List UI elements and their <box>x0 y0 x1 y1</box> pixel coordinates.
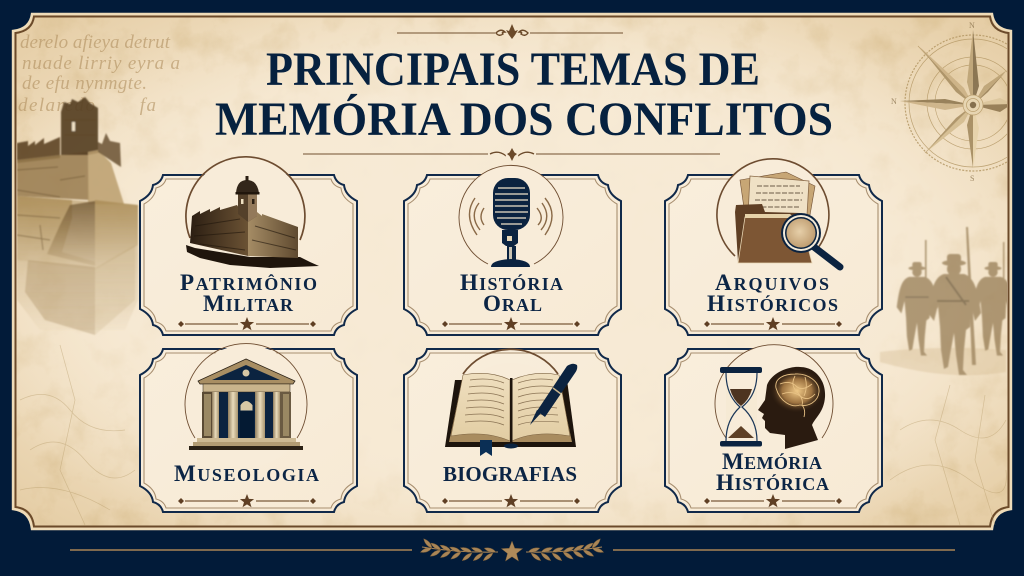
icon: head with brain <box>758 367 825 449</box>
footer ornament <box>70 537 955 562</box>
title: MEMÓRIA DOS CONFLITOS <box>215 92 833 146</box>
compass rose: N <box>891 97 897 106</box>
compass rose: S <box>970 174 974 183</box>
panel: Arquivos Históricos: HISTÓRICOS <box>707 291 838 316</box>
title <box>215 43 833 146</box>
title ornament top <box>397 24 623 39</box>
title ornament bottom <box>303 148 720 161</box>
label: BIOGRAFIAS <box>443 462 577 486</box>
handwriting background: delaredo fa <box>18 95 156 116</box>
panel: História Oral <box>404 165 621 335</box>
handwriting background: derelo afieya detrut <box>20 32 171 53</box>
compass rose <box>891 22 1007 181</box>
panel: Biografias <box>404 349 621 512</box>
panel: Patrimônio Militar <box>140 157 357 335</box>
panel: História Oral: ORAL <box>483 291 542 316</box>
icon: open book and pen <box>445 364 577 456</box>
label: MEMÓRIA <box>722 449 822 474</box>
label: PATRIMÔNIO <box>180 270 317 295</box>
handwriting background <box>18 32 180 116</box>
panel: Memória Histórica: HISTÓRICA <box>716 470 829 495</box>
title: PRINCIPAIS TEMAS DE <box>266 43 760 96</box>
divider <box>178 317 316 330</box>
panel: Museologia <box>140 344 357 512</box>
compass rose: N <box>969 21 975 30</box>
panel: Arquivos Históricos <box>665 159 882 335</box>
panel: Memória Histórica <box>665 345 882 512</box>
divider <box>442 494 580 507</box>
handwriting background: nuade lirriy eyra a <box>22 53 180 74</box>
icon: hourglass <box>720 367 762 446</box>
icon: fort <box>186 176 319 268</box>
icon: museum <box>189 359 303 450</box>
divider <box>442 317 580 330</box>
panel: Patrimônio Militar: MILITAR <box>203 291 294 316</box>
label: MUSEOLOGIA <box>174 461 319 486</box>
handwriting background: de efu nynmgte. <box>22 73 147 94</box>
divider <box>178 494 316 507</box>
icon: folder and magnifier <box>735 172 840 267</box>
divider <box>704 317 842 330</box>
label: ARQUIVOS <box>715 270 829 295</box>
castle illustration <box>17 97 138 335</box>
soldiers marching <box>880 227 1014 375</box>
label: HISTÓRIA <box>460 270 563 295</box>
divider <box>704 494 842 507</box>
icon: microphone <box>469 178 552 267</box>
faint old maps <box>20 345 1006 525</box>
